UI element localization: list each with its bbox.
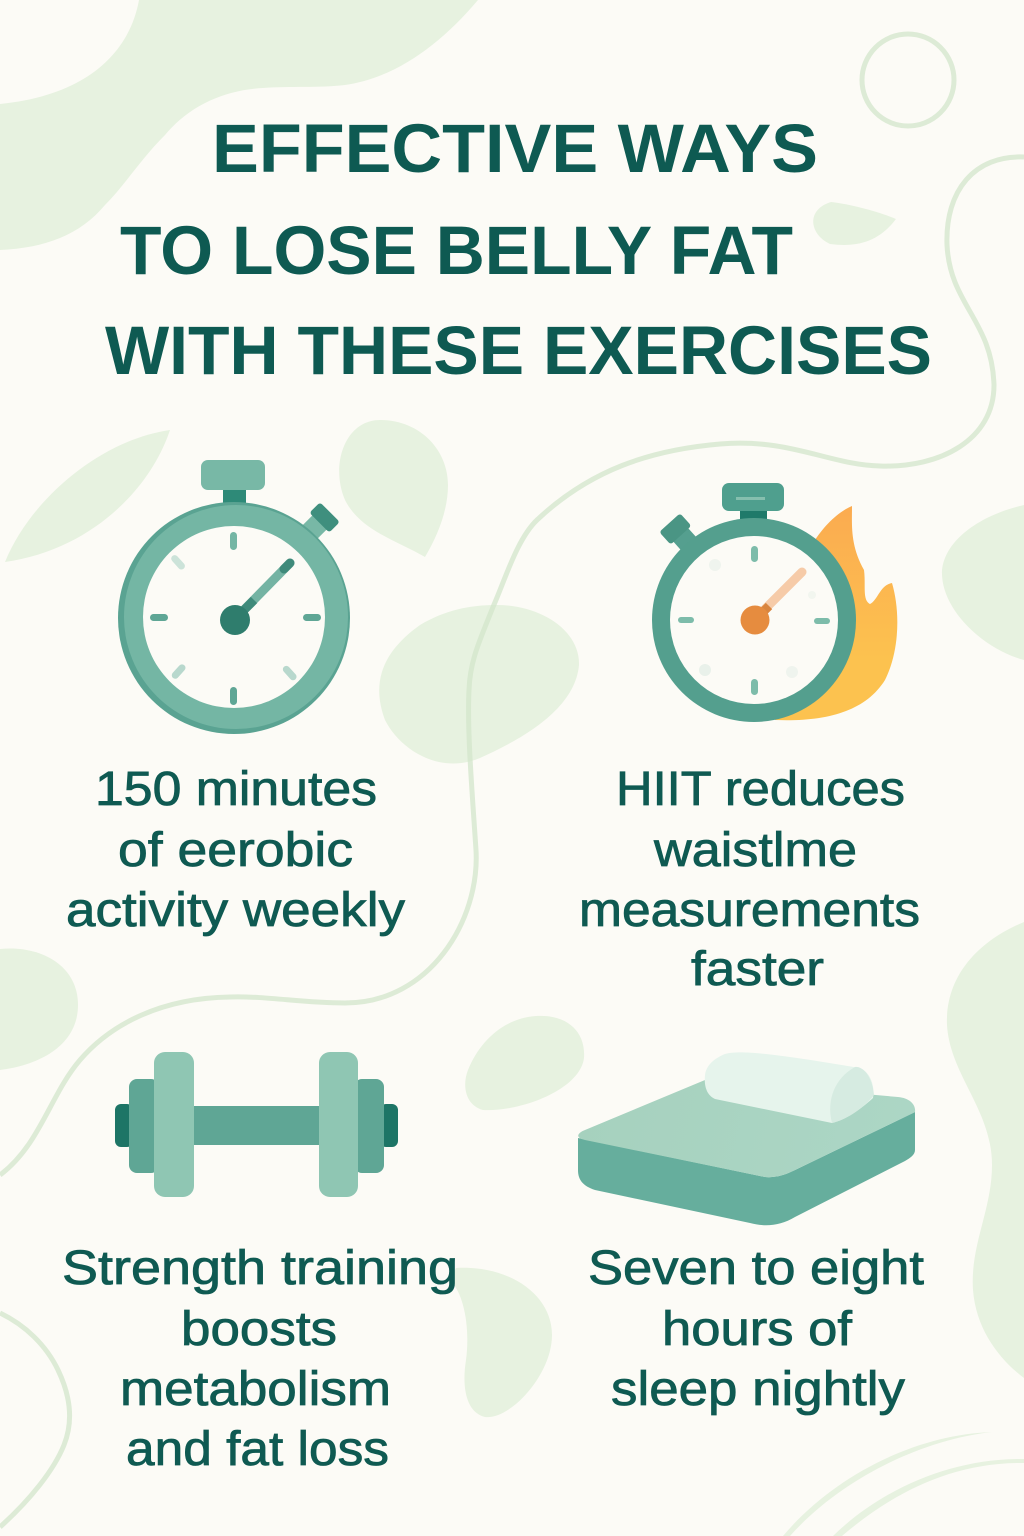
text: 150 minutes of aerobic activity: 150 minutes: [95, 763, 377, 816]
title: [105, 110, 932, 389]
title: WITH THESE EXERCISES: [105, 312, 932, 389]
text: strength training: boosts: [181, 1303, 337, 1356]
icon: bed: [578, 1052, 915, 1225]
text: HIIT reduces waistline: [579, 763, 920, 996]
text: HIIT reduces waistline: measurements: [579, 884, 920, 937]
text: strength training: metabolism: [120, 1363, 391, 1416]
text: 150 minutes of aerobic activity: of eerobic: [118, 824, 353, 877]
text: HIIT reduces waistline: HIIT reduces: [616, 763, 905, 816]
text: strength training: Strength training: [62, 1242, 458, 1295]
text: strength training: [62, 1242, 458, 1476]
icon: stopwatch with flame: [652, 483, 897, 722]
title: EFFECTIVE WAYS: [212, 110, 818, 187]
text: seven to eight hours of sleep: sleep nightly: [611, 1363, 905, 1416]
text: strength training: and fat loss: [126, 1423, 389, 1476]
text: seven to eight hours of sleep: hours of: [662, 1303, 853, 1356]
icon: stopwatch: [118, 460, 350, 734]
text: HIIT reduces waistline: waistlme: [653, 824, 857, 877]
text: seven to eight hours of sleep: [588, 1242, 924, 1416]
icon: dumbbell: [115, 1052, 398, 1197]
text: seven to eight hours of sleep: Seven to eight: [588, 1242, 924, 1295]
title: TO LOSE BELLY FAT: [120, 212, 793, 289]
text: 150 minutes of aerobic activity: [66, 763, 405, 937]
text: 150 minutes of aerobic activity: activity weekly: [66, 884, 405, 937]
text: HIIT reduces waistline: faster: [691, 943, 824, 996]
